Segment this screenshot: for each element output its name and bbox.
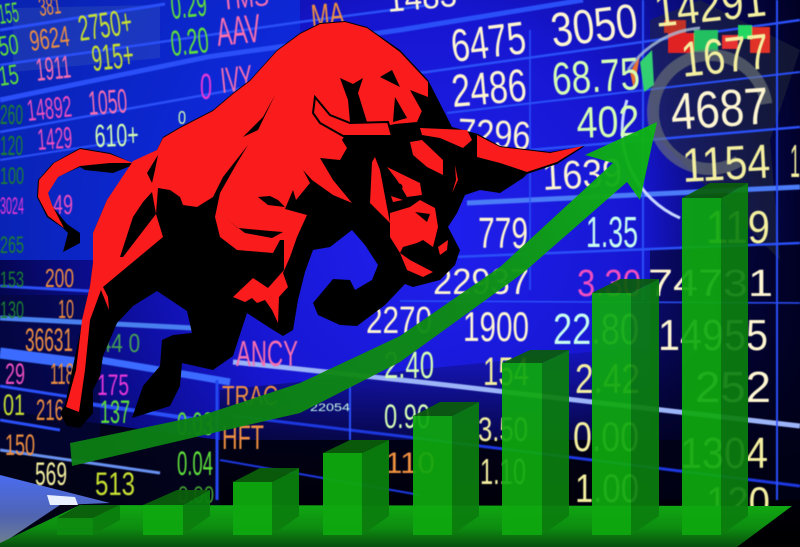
board numbers and labels: 1900 xyxy=(463,303,529,350)
board numbers and labels: 130 xyxy=(0,297,24,324)
board numbers and labels: 119 xyxy=(706,201,770,253)
board numbers and labels: 610+ xyxy=(94,116,139,154)
board numbers and labels: 200 xyxy=(45,263,74,293)
board numbers and labels: 68.75 xyxy=(550,47,641,105)
board numbers and labels: 175 xyxy=(97,369,129,402)
board numbers and labels: 0.03 xyxy=(177,406,213,442)
board numbers and labels: 0.00 xyxy=(178,482,214,509)
board numbers and labels: ANCY xyxy=(236,333,298,374)
board numbers and labels: 1.35 xyxy=(586,208,638,257)
board numbers and labels: 265 xyxy=(0,232,24,259)
board numbers and labels: 1429 xyxy=(36,122,73,157)
board numbers and labels: 1.10 xyxy=(480,451,526,492)
board numbers and labels: 7296 xyxy=(457,111,532,159)
board numbers and labels: 14955 xyxy=(658,311,768,360)
board numbers and labels: 118 xyxy=(50,358,74,391)
chart overlay: coloured blocks and rings xyxy=(622,20,788,218)
board numbers and labels: 1677 xyxy=(678,23,772,88)
board numbers and labels: 0.00 xyxy=(573,413,639,460)
board numbers and labels: 402 xyxy=(576,97,640,148)
board numbers and labels: 9624 xyxy=(28,21,72,58)
board numbers and labels: HFT xyxy=(222,419,264,457)
board numbers and labels: 120 xyxy=(706,478,770,525)
board numbers and labels: 0 xyxy=(200,66,212,107)
board numbers and labels: 49 xyxy=(53,189,73,220)
board numbers and labels: 100 xyxy=(0,163,24,190)
board numbers and labels: 2486 xyxy=(449,59,529,117)
board numbers and labels: 10 xyxy=(58,294,74,324)
bull body xyxy=(66,22,428,412)
board numbers and labels: 779 xyxy=(478,209,528,258)
board numbers and labels: 74731 xyxy=(648,263,773,305)
board numbers and labels: 2270 xyxy=(366,300,432,342)
bar 8 xyxy=(682,183,748,535)
board numbers and labels: 260 xyxy=(0,99,23,130)
board numbers and labels: 252 xyxy=(695,363,771,412)
bull xyxy=(37,21,585,428)
board numbers and labels: 44 0 xyxy=(100,328,140,358)
board numbers and labels: 110 xyxy=(385,447,435,480)
board numbers and labels: 0 xyxy=(178,108,186,128)
board numbers and labels: 22937 xyxy=(433,261,529,302)
board numbers and labels: 154 xyxy=(483,350,529,394)
board numbers and labels: TRAC xyxy=(222,380,278,411)
board numbers and labels: 4687 xyxy=(669,77,771,142)
board numbers and labels: 1639 xyxy=(541,151,623,199)
bull face xyxy=(370,128,472,277)
board numbers and labels: 36631 xyxy=(25,322,73,358)
board numbers and labels: 569 xyxy=(35,456,67,492)
bar 4 xyxy=(323,440,389,535)
board numbers and labels: 1304 xyxy=(680,429,768,478)
bar 6 xyxy=(502,350,569,535)
bull body shading xyxy=(120,70,428,257)
board numbers and labels: 1911 xyxy=(34,49,73,88)
bar 2 xyxy=(143,490,210,535)
board numbers and labels: 14892 xyxy=(25,90,73,128)
green trend arrow xyxy=(70,122,657,466)
board numbers and labels: AAV xyxy=(214,7,263,55)
bull right horn xyxy=(477,135,583,172)
board numbers and labels: IVY xyxy=(219,57,255,101)
board numbers and labels: 22.80 xyxy=(553,305,639,354)
board numbers and labels: 22054 xyxy=(310,402,350,414)
bull eye and nostril xyxy=(396,184,430,256)
board numbers and labels: 0.04 xyxy=(177,445,213,483)
board numbers and labels: 153 xyxy=(0,267,24,292)
bull tail xyxy=(37,148,135,252)
board numbers and labels: 216 xyxy=(36,394,64,427)
board numbers and labels: 6475 xyxy=(448,11,529,72)
board numbers and labels: 1050 xyxy=(87,82,128,123)
bar 3 xyxy=(233,468,299,535)
board numbers and labels: 01 xyxy=(3,389,25,422)
board numbers and labels: 29 xyxy=(5,358,25,391)
board numbers and labels: 2.40 xyxy=(384,345,434,387)
board numbers and labels: 137 xyxy=(100,394,130,430)
board numbers and labels: 150 xyxy=(5,429,35,462)
bar 7 xyxy=(592,279,659,535)
board numbers and labels: 1154 xyxy=(681,135,771,193)
board numbers and labels: 915+ xyxy=(90,34,136,79)
board numbers and labels: 0.20 xyxy=(169,19,211,64)
board numbers and labels: 3.50 xyxy=(478,411,528,449)
board numbers and labels: 1.00 xyxy=(575,467,639,511)
board numbers and labels: 3024 xyxy=(0,193,24,220)
chart floor xyxy=(0,505,792,547)
board numbers and labels: 0.90 xyxy=(384,398,430,436)
board numbers and labels: 3.30 xyxy=(577,263,641,305)
bar 5 xyxy=(413,402,479,535)
bar chart xyxy=(0,183,792,547)
bull silhouette xyxy=(60,21,585,428)
board numbers and labels: 120 xyxy=(0,130,23,161)
board numbers and labels: 2.42 xyxy=(575,355,640,402)
board numbers and labels: 513 xyxy=(95,466,135,502)
bar 1 xyxy=(57,505,120,535)
bull left horn xyxy=(313,97,392,136)
board numbers and labels: 0 xyxy=(190,287,208,303)
